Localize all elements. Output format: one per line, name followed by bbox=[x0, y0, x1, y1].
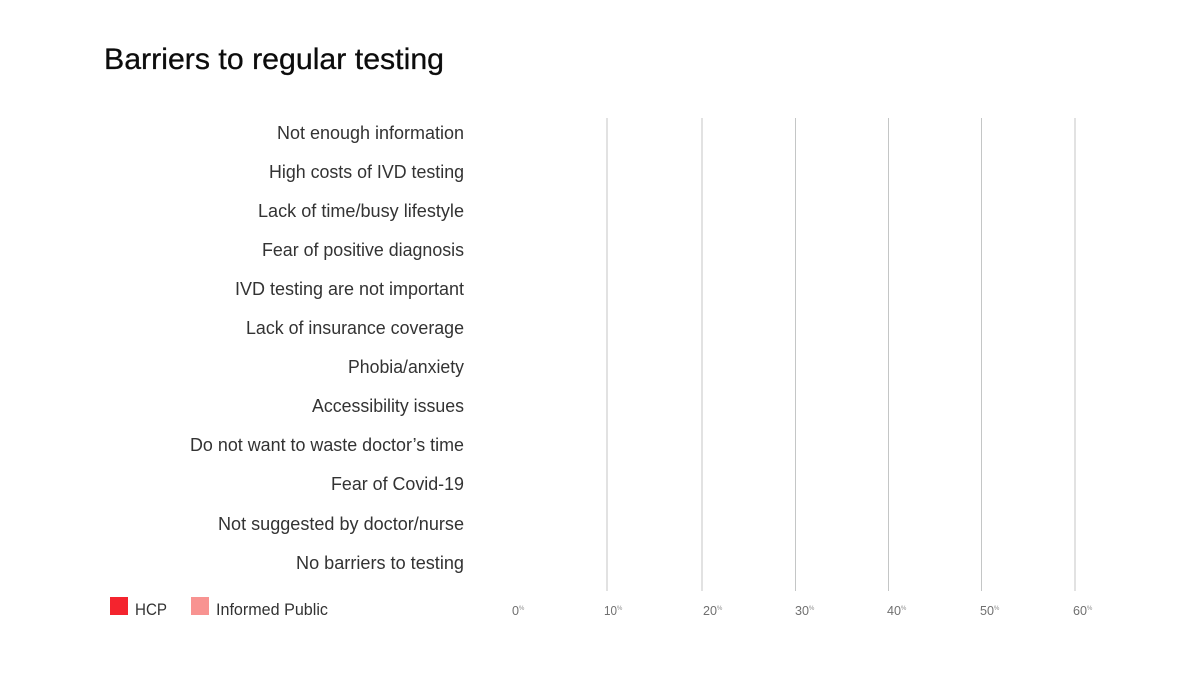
category labels: Fear of Covid-19 bbox=[331, 473, 464, 494]
category labels: Not enough information bbox=[277, 122, 464, 143]
category labels: Fear of positive diagnosis bbox=[262, 239, 464, 260]
x axis tick labels: 40 bbox=[887, 603, 901, 618]
x axis tick labels: % bbox=[994, 606, 1000, 612]
x axis tick labels bbox=[512, 603, 1093, 618]
legend swatch: HCP bbox=[110, 597, 128, 615]
legend label: HCP: HCP bbox=[135, 601, 167, 619]
x axis tick labels: 60 bbox=[1073, 603, 1087, 618]
category labels: Not suggested by doctor/nurse bbox=[218, 513, 464, 534]
legend label: Informed Public: Informed Public bbox=[216, 601, 328, 619]
x axis tick labels: % bbox=[1087, 606, 1093, 612]
x axis tick labels: 10 bbox=[604, 603, 617, 618]
x axis tick labels: % bbox=[617, 606, 623, 612]
x axis tick labels: 30 bbox=[795, 603, 809, 618]
category labels: High costs of IVD testing bbox=[269, 161, 464, 182]
category labels bbox=[190, 122, 465, 573]
category labels: Lack of insurance coverage bbox=[246, 317, 464, 338]
legend bbox=[110, 597, 328, 619]
category labels: Phobia/anxiety bbox=[348, 356, 465, 377]
x axis tick labels: % bbox=[901, 606, 907, 612]
x axis tick labels: % bbox=[717, 606, 723, 612]
category labels: No barriers to testing bbox=[296, 552, 464, 573]
category labels: Lack of time/busy lifestyle bbox=[258, 200, 464, 221]
category labels: Do not want to waste doctor’s time bbox=[190, 434, 464, 455]
x axis tick labels: % bbox=[519, 606, 525, 612]
title: Barriers to regular testing bbox=[104, 43, 444, 76]
chart gridlines bbox=[607, 118, 1075, 591]
category labels: Accessibility issues bbox=[312, 395, 464, 416]
legend swatch: Informed Public bbox=[191, 597, 209, 615]
x axis tick labels: 50 bbox=[980, 603, 994, 618]
x axis tick labels: % bbox=[809, 606, 815, 612]
category labels: IVD testing are not important bbox=[235, 278, 464, 299]
x axis tick labels: 20 bbox=[703, 603, 717, 618]
x axis tick labels: 0 bbox=[512, 603, 519, 618]
